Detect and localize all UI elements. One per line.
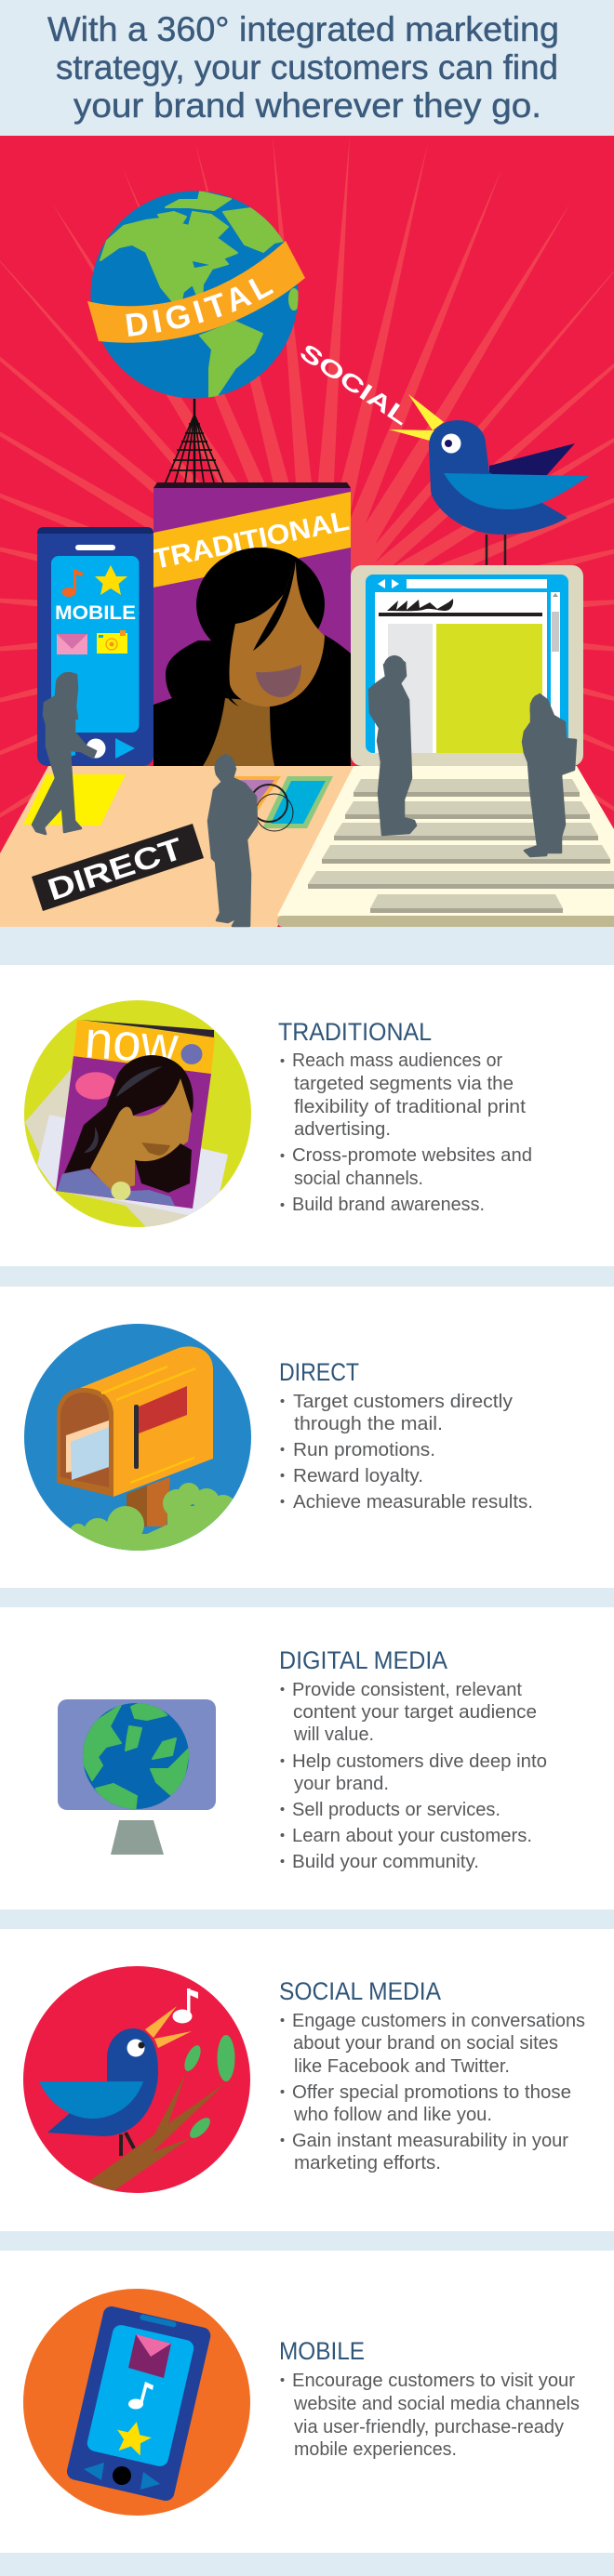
panel: mobile phone: [37, 527, 154, 766]
direct mail pieces: [223, 776, 333, 831]
figure: walking woman: [33, 672, 96, 834]
panel: digital media: [58, 1646, 547, 1872]
icon: star: [95, 565, 127, 595]
bullet list: marketing efforts.: [294, 2152, 441, 2173]
bullet list: Run promotions.: [293, 1439, 435, 1460]
panel: direct: [24, 1324, 533, 1562]
icon: monitor with globe: [58, 1699, 216, 1855]
heading: DIGITAL MEDIA: [279, 1646, 447, 1674]
bullet list: Build your community.: [292, 1851, 479, 1872]
bullet list: content your target audience: [293, 1701, 537, 1723]
bullet list: [281, 1391, 533, 1513]
phone buttons: [70, 738, 135, 759]
heading: DIRECT: [279, 1358, 359, 1386]
banner: traditional: [151, 492, 352, 588]
figure: woman at laptop: [523, 694, 576, 856]
bullet list: Reach mass audiences or: [292, 1050, 502, 1071]
bullet list: Learn about your customers.: [292, 1825, 532, 1846]
figure: man at laptop: [369, 655, 416, 835]
bullet list: Build brand awareness.: [292, 1194, 485, 1215]
label: direct: DIRECT: [44, 831, 187, 907]
panel: traditional: [24, 1000, 532, 1232]
bullet list: Achieve measurable results.: [293, 1491, 533, 1513]
bullet list: website and social media channels: [293, 2393, 580, 2414]
bullet list: Offer special promotions to those: [292, 2081, 571, 2103]
bullet list: Provide consistent, relevant: [292, 1679, 522, 1700]
icon: music note: [173, 1988, 198, 2023]
heading: TRADITIONAL: [278, 1018, 432, 1046]
icon: music note: [61, 569, 83, 597]
heading: SOCIAL MEDIA: [279, 1977, 441, 2005]
icon: bird: [389, 394, 589, 565]
panel: social media: [23, 1966, 585, 2193]
bullet list: [281, 1679, 547, 1872]
figure: man in foreground: [208, 755, 257, 926]
bullet list: advertising.: [294, 1118, 391, 1140]
website logo: [387, 599, 453, 611]
bullet list: Sell products or services.: [292, 1799, 501, 1820]
label: social: SOCIAL: [295, 338, 414, 430]
title: your brand wherever they go.: [73, 86, 541, 125]
label: mobile: MOBILE: [55, 602, 136, 624]
banner: traditional: TRADITIONAL: [151, 506, 352, 575]
panel: traditional magazine: [151, 482, 352, 766]
bullet list: Target customers directly: [293, 1391, 514, 1412]
title: With a 360° integrated marketing: [47, 10, 559, 48]
bullet list: Engage customers in conversations: [292, 2010, 585, 2031]
bullet list: Help customers dive deep into: [292, 1750, 547, 1772]
icon: globe: [87, 192, 305, 398]
icon: tilted phone: [23, 2289, 250, 2516]
bullet list: Cross-promote websites and: [292, 1144, 532, 1166]
icon: music note: [128, 2382, 154, 2410]
icon: magazine: [24, 1000, 251, 1232]
icon: mailbox: [24, 1324, 251, 1562]
icon: singing bird on branch: [23, 1966, 250, 2193]
icon: magazine: now: [83, 1010, 180, 1075]
title: [47, 10, 559, 125]
bullet list: [281, 1050, 532, 1215]
bullet list: who follow and like you.: [293, 2104, 492, 2125]
icon: camera: [97, 630, 127, 654]
bullet list: Reward loyalty.: [293, 1465, 423, 1486]
bullet list: [281, 2010, 585, 2173]
bullet list: via user-friendly, purchase-ready: [294, 2416, 565, 2437]
bullet list: will value.: [293, 1724, 374, 1745]
keyboard: [308, 779, 614, 913]
bullet list: about your brand on social sites: [293, 2032, 558, 2054]
bullet list: social channels.: [294, 1168, 423, 1189]
woman portrait: [154, 548, 351, 766]
panel: direct floor: [0, 766, 355, 927]
icon: envelope: [57, 634, 87, 654]
banner: digital: DIGITAL: [126, 279, 274, 337]
sunburst rays: [0, 136, 614, 864]
bullet list: flexibility of traditional print: [294, 1096, 526, 1117]
bullet list: [281, 2370, 580, 2460]
banner: digital: [87, 241, 305, 343]
panel: laptop: [277, 565, 614, 927]
bullet list: Gain instant measurability in your: [292, 2130, 568, 2151]
bullet list: like Facebook and Twitter.: [294, 2055, 510, 2077]
bullet list: Encourage customers to visit your: [292, 2370, 575, 2391]
panel: hero illustration: [0, 136, 614, 928]
title: strategy, your customers can find: [56, 48, 558, 86]
bullet list: mobile experiences.: [294, 2438, 457, 2460]
icon: broadcast tower: [166, 399, 223, 482]
label: direct: [32, 824, 204, 911]
heading: MOBILE: [279, 2337, 365, 2365]
panel: mobile: [23, 2289, 580, 2516]
bullet list: through the mail.: [294, 1413, 443, 1434]
bullet list: targeted segments via the: [294, 1073, 514, 1094]
icon: star: [113, 2418, 154, 2457]
bullet list: your brand.: [294, 1773, 389, 1794]
